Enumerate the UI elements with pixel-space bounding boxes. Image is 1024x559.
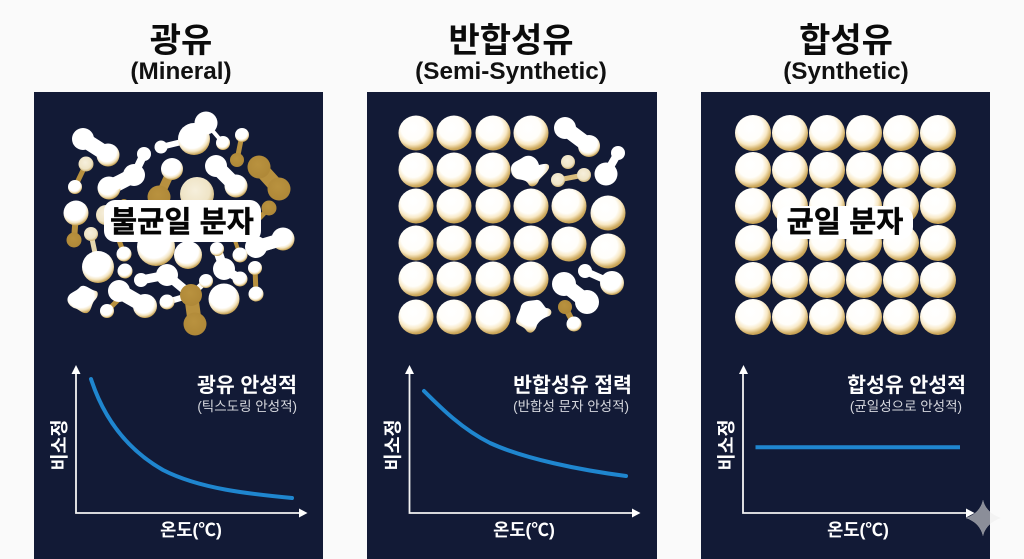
irregular molecules bbox=[64, 112, 294, 336]
mostly uniform molecules bbox=[398, 116, 626, 334]
title: semi-synthetic: 반합성유 bbox=[448, 22, 574, 60]
chart: synthetic viscosity line bbox=[716, 365, 974, 540]
chart: mineral viscosity curve bbox=[49, 365, 308, 540]
chart: semi-synthetic viscosity curve bbox=[382, 365, 640, 540]
chart heading: 반합성유 접력 bbox=[513, 374, 632, 397]
y axis label: 비소정 bbox=[716, 419, 737, 471]
curve bbox=[424, 391, 626, 476]
x axis label: 온도(℃) bbox=[827, 520, 889, 540]
label: uniform molecules: 균일 분자 bbox=[787, 206, 903, 239]
irregular molecules bbox=[511, 117, 625, 333]
title: synthetic bbox=[783, 22, 909, 85]
title: synthetic: 합성유 bbox=[799, 22, 893, 60]
y axis label: 비소정 bbox=[49, 419, 70, 471]
panel: synthetic bbox=[701, 92, 990, 559]
title: semi-synthetic: (Semi-Synthetic) bbox=[415, 58, 607, 85]
chart heading: 광유 안성적 bbox=[197, 374, 297, 397]
panel: mineral bbox=[34, 92, 323, 559]
icon: sparkle watermark bbox=[966, 500, 990, 536]
chart heading: 합성유 안성적 bbox=[847, 374, 966, 397]
axes bbox=[405, 365, 640, 518]
title: semi-synthetic bbox=[415, 22, 607, 85]
x axis label: 온도(℃) bbox=[160, 520, 222, 540]
y axis label: 비소정 bbox=[382, 419, 404, 471]
curve bbox=[91, 379, 292, 498]
title: mineral: (Mineral) bbox=[130, 58, 232, 85]
title: mineral: 광유 bbox=[150, 22, 212, 60]
panel: semi-synthetic bbox=[367, 92, 657, 559]
title: synthetic: (Synthetic) bbox=[783, 58, 909, 85]
flat line bbox=[756, 445, 960, 449]
label: irregular molecules: 불균일 분자 bbox=[110, 206, 254, 239]
x axis label: 온도(℃) bbox=[493, 520, 555, 540]
title: mineral bbox=[130, 22, 232, 85]
axes bbox=[72, 365, 308, 518]
axes bbox=[739, 365, 974, 518]
uniform molecules bbox=[735, 115, 956, 335]
chart note: (균일성으로 안성적) bbox=[850, 399, 962, 414]
chart note: (반합성 문자 안성적) bbox=[513, 399, 629, 414]
chart note: (틱스도링 안성적) bbox=[197, 399, 297, 414]
